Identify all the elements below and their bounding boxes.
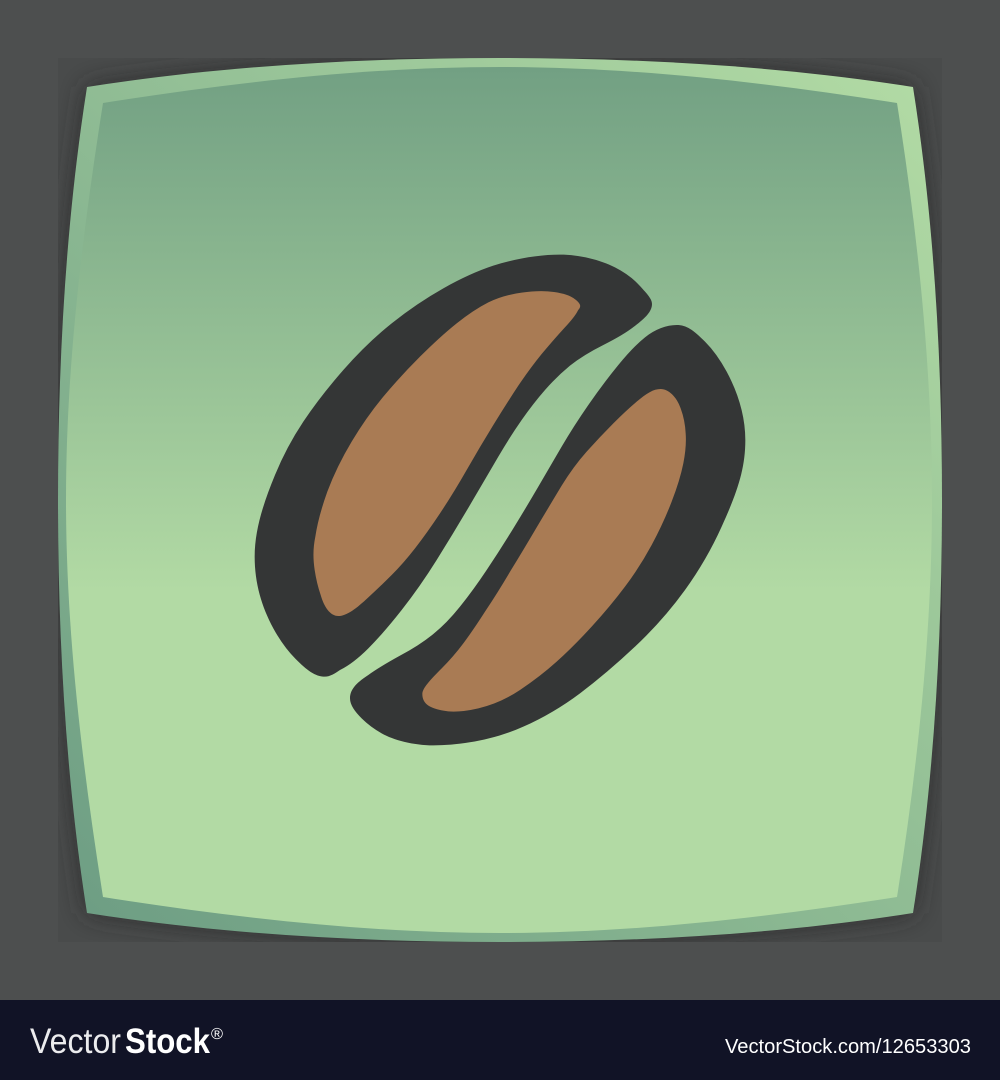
left bean half [255,255,652,677]
footer logo [30,1022,223,1061]
footer image id: VectorStock.com/12653303 [725,1036,971,1058]
footer logo: Stock [125,1022,210,1061]
right bean half [350,325,745,745]
icon: coffee bean [255,255,745,745]
plate shadow [58,58,942,942]
footer logo: ® [211,1026,223,1043]
footer logo: Vector [30,1022,121,1061]
plate face [66,67,932,933]
footer bar [0,1000,1000,1080]
plate rim [58,58,942,942]
